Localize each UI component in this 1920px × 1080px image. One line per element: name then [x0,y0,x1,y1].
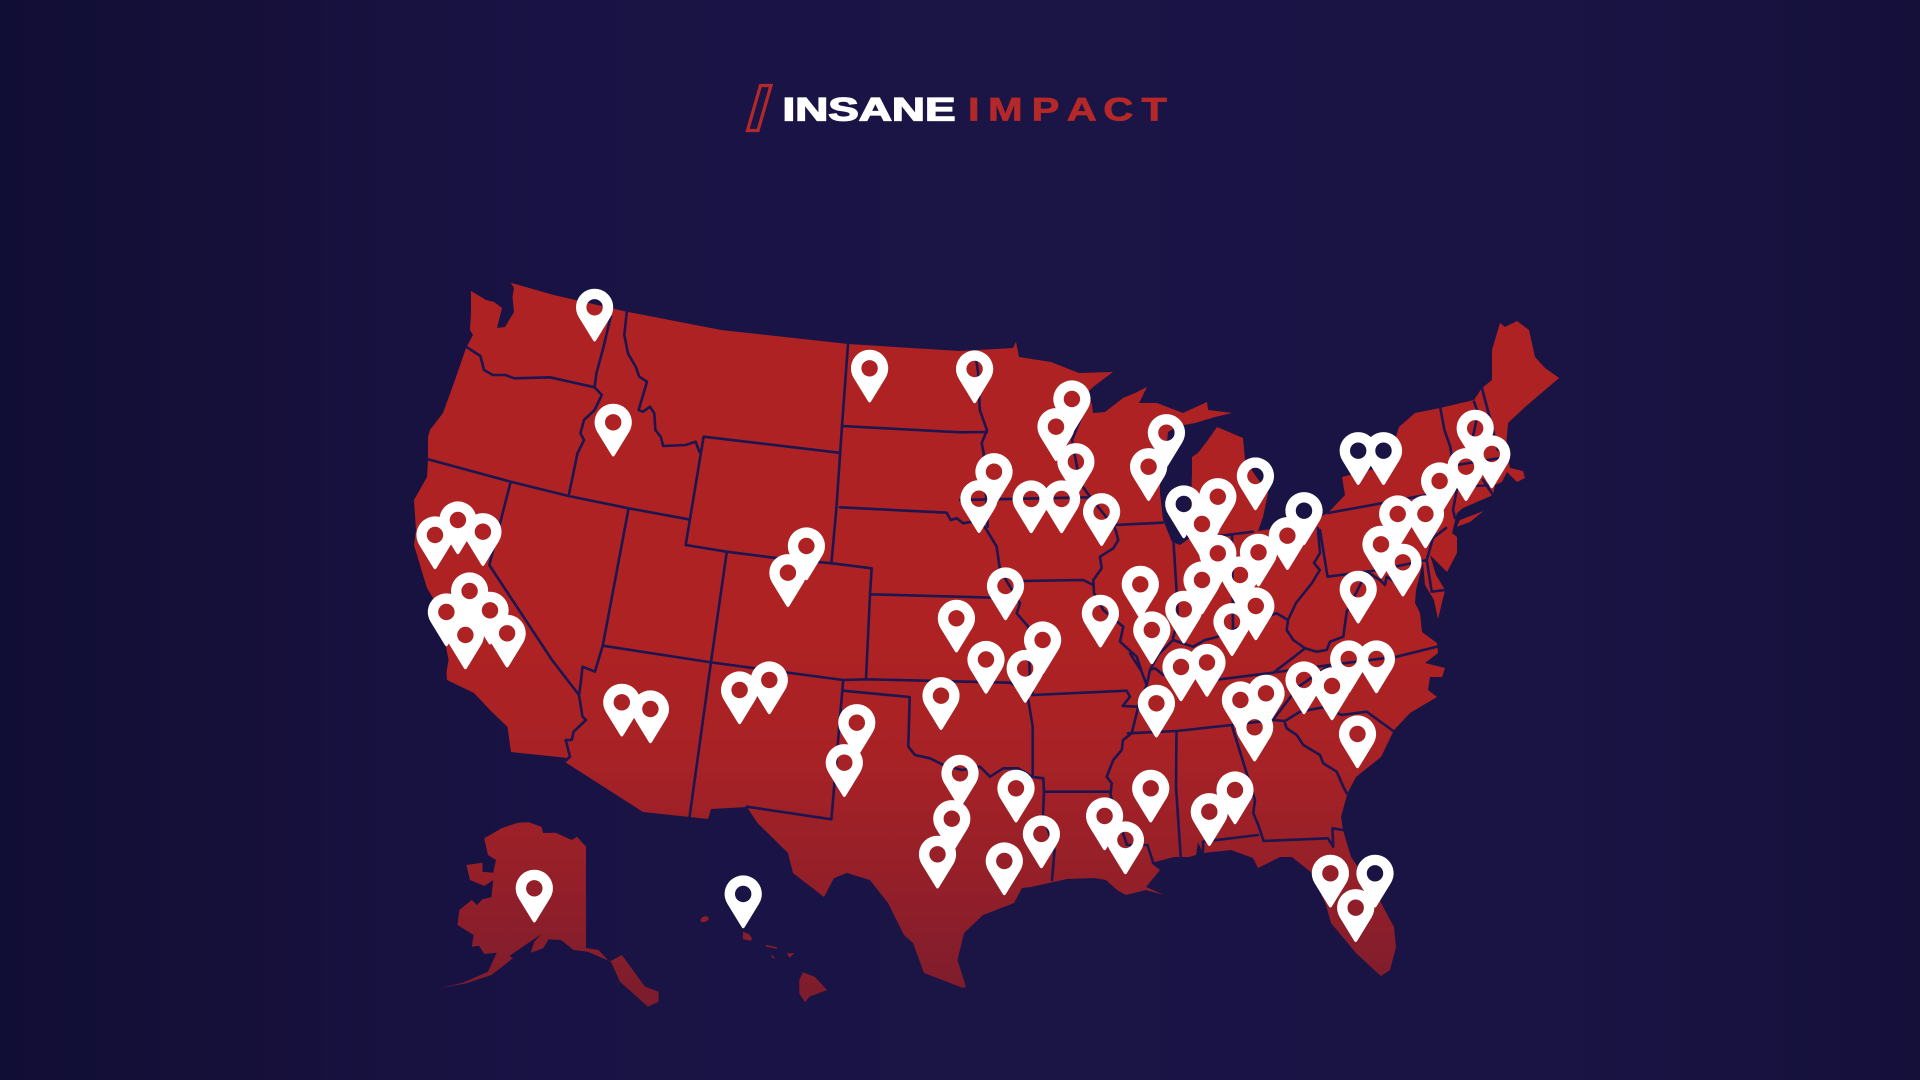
map of the United States [414,283,1559,1007]
pin: Alaska [516,870,553,923]
landmass: Hawaii [700,916,827,1002]
pins: Great Lakes and Ohio Valley [1162,457,1323,701]
logo slash mark [748,86,771,130]
logo: Insane Impact [748,86,1167,130]
pins: Southeast [1138,640,1395,768]
logo word: INSANE: INSANE [782,92,956,128]
pins: Pacific Northwest and northern plains [576,289,993,457]
state borders [428,312,1500,880]
pins: Northeast [1340,410,1510,624]
pins: Southwest and Rockies [603,527,875,797]
pins: Gulf Coast and Florida [1086,770,1394,942]
Long Island [1457,511,1484,527]
pins: California [416,501,526,669]
pins: Upper Midwest [960,380,1185,664]
logo word: IMPACT: IMPACT [968,91,1167,128]
pin: Hawaii [725,875,762,928]
landmass: contiguous states [414,283,1559,988]
pins: Kansas, Oklahoma and Texas [919,567,1061,895]
location pins [416,289,1510,942]
pin holes showing the map beneath [426,299,1500,916]
landmass: Alaska [440,822,659,1007]
